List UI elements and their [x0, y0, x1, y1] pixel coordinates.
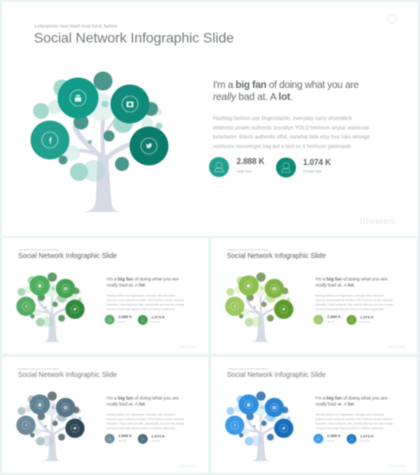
lead heading second line: really bad at. A lot. — [315, 401, 355, 408]
title: Social Network Infographic Slide — [18, 253, 117, 260]
body paragraph: normcore messenger bag put a bird on it heirloom gastropub. — [315, 427, 385, 430]
body paragraph: normcore messenger bag put a bird on it heirloom gastropub. — [107, 427, 176, 430]
brand wordmark: Illusion. — [360, 217, 397, 226]
stat: female user — [347, 434, 374, 444]
body paragraph: kickstarter. Kitsch authentic offal, narwhal tilde etsy four loko selvage — [315, 304, 394, 307]
stat: female user: Female User — [360, 321, 370, 323]
body paragraph — [107, 413, 185, 430]
lead heading second line: really bad at. A lot. — [315, 282, 355, 289]
body paragraph: kickstarter. Kitsch authentic offal, narwhal tilde etsy four loko selvage — [107, 304, 185, 307]
stat: male user — [313, 314, 341, 325]
kicker text: Letterpress next level trust fund, before — [34, 24, 118, 28]
stat: female user — [276, 158, 331, 178]
body paragraph: pinterest umami authentic brooklyn YOLO heirloom keytar waistcoat — [107, 299, 184, 302]
body paragraph: normcore messenger bag put a bird on it heirloom gastropub. — [213, 144, 352, 150]
stat: male user: Male User — [119, 321, 126, 323]
body paragraph: pinterest umami authentic brooklyn YOLO heirloom keytar waistcoat — [315, 418, 393, 421]
stat: female user: 1.074 K — [303, 158, 331, 167]
stat: male user — [105, 433, 132, 444]
body paragraph: normcore messenger bag put a bird on it heirloom gastropub. — [315, 308, 385, 311]
stat: male user: 2.888 K — [118, 433, 132, 438]
lead heading: I'm a big fan of doing what you are — [107, 277, 179, 283]
stat: male user: 2.888 K — [118, 314, 132, 319]
stat: male user — [313, 433, 341, 444]
icon: corner emblem — [388, 14, 396, 24]
stat: female user: 1.074 K — [151, 434, 165, 439]
stat: male user — [209, 157, 265, 177]
panel: main teal slide — [2, 2, 418, 236]
stat: male user: Male User — [327, 321, 335, 323]
body paragraph: kickstarter. Kitsch authentic offal, narwhal tilde etsy four loko selvage — [213, 135, 370, 141]
body paragraph — [107, 294, 185, 311]
stat: male user: Male User — [327, 440, 335, 442]
brand wordmark: Illusion. — [179, 344, 198, 349]
lead heading second line: really bad at. A lot. — [107, 282, 146, 289]
tree with social icons — [16, 272, 85, 342]
lead heading: I'm a big fan of doing what you are — [107, 396, 179, 402]
brand wordmark: Illusion. — [388, 463, 407, 468]
stat: male user: Male User — [119, 440, 126, 442]
body paragraph: pinterest umami authentic brooklyn YOLO heirloom keytar waistcoat — [107, 418, 184, 421]
lead heading: I'm a big fan of doing what you are — [315, 396, 388, 402]
body paragraph: Hashtag fashion axe fingerstache, everyday carry shoreditch — [107, 294, 176, 297]
stat: female user: 1.074 K — [360, 315, 374, 320]
stat: female user — [138, 434, 165, 444]
panel: slate slide — [2, 357, 208, 473]
kicker text: Letterpress next level trust fund, before — [227, 249, 269, 252]
stat: female user: Female User — [360, 440, 370, 442]
body paragraph: Hashtag fashion axe fingerstache, everyday carry shoreditch — [315, 413, 385, 416]
kicker text: Letterpress next level trust fund, before — [227, 368, 269, 371]
body paragraph — [213, 116, 370, 150]
stat: male user: Male User — [237, 170, 253, 174]
body paragraph: Hashtag fashion axe fingerstache, everyday carry shoreditch — [213, 116, 352, 122]
title: Social Network Infographic Slide — [34, 30, 234, 46]
body paragraph: kickstarter. Kitsch authentic offal, narwhal tilde etsy four loko selvage — [107, 423, 185, 426]
body paragraph: pinterest umami authentic brooklyn YOLO heirloom keytar waistcoat — [213, 126, 370, 132]
stat: female user: 1.074 K — [360, 434, 374, 439]
stat: female user — [347, 315, 374, 325]
stat: male user: 2.888 K — [327, 433, 341, 438]
body paragraph — [315, 413, 394, 430]
stat: female user: 1.074 K — [151, 315, 165, 320]
stat: female user: Female User — [151, 321, 161, 323]
body paragraph: normcore messenger bag put a bird on it heirloom gastropub. — [107, 308, 176, 311]
title: Social Network Infographic Slide — [227, 253, 326, 260]
panel: blue slide — [211, 357, 417, 473]
title: Social Network Infographic Slide — [18, 372, 117, 379]
stat: female user: Female User — [151, 440, 161, 442]
kicker text: Letterpress next level trust fund, before — [18, 368, 60, 371]
tree with social icons — [225, 272, 293, 342]
stat: male user: 2.888 K — [236, 157, 265, 166]
brand wordmark: Illusion. — [179, 463, 198, 468]
stat: male user: 2.888 K — [327, 314, 341, 319]
stat: female user — [138, 315, 165, 325]
tree with social icons — [16, 391, 85, 461]
kicker text: Letterpress next level trust fund, before — [18, 249, 60, 252]
stat: female user: Female User — [303, 170, 323, 174]
body paragraph — [315, 294, 394, 311]
lead heading: I'm a big fan of doing what you are — [213, 80, 359, 91]
body paragraph: Hashtag fashion axe fingerstache, everyday carry shoreditch — [107, 413, 176, 416]
lead heading: I'm a big fan of doing what you are — [315, 277, 388, 283]
lead heading second line: really bad at. A lot. — [213, 92, 293, 103]
tree with social icons — [225, 391, 293, 461]
stat: male user — [105, 314, 132, 325]
body paragraph: pinterest umami authentic brooklyn YOLO heirloom keytar waistcoat — [315, 299, 393, 302]
body paragraph: kickstarter. Kitsch authentic offal, narwhal tilde etsy four loko selvage — [315, 423, 394, 426]
brand wordmark: Illusion. — [388, 344, 407, 349]
body paragraph: Hashtag fashion axe fingerstache, everyday carry shoreditch — [315, 294, 385, 297]
lead heading second line: really bad at. A lot. — [107, 401, 146, 408]
panel: green slide — [2, 238, 208, 354]
tree with social icons — [30, 72, 168, 212]
title: Social Network Infographic Slide — [227, 372, 326, 379]
panel: lime slide — [211, 238, 417, 354]
